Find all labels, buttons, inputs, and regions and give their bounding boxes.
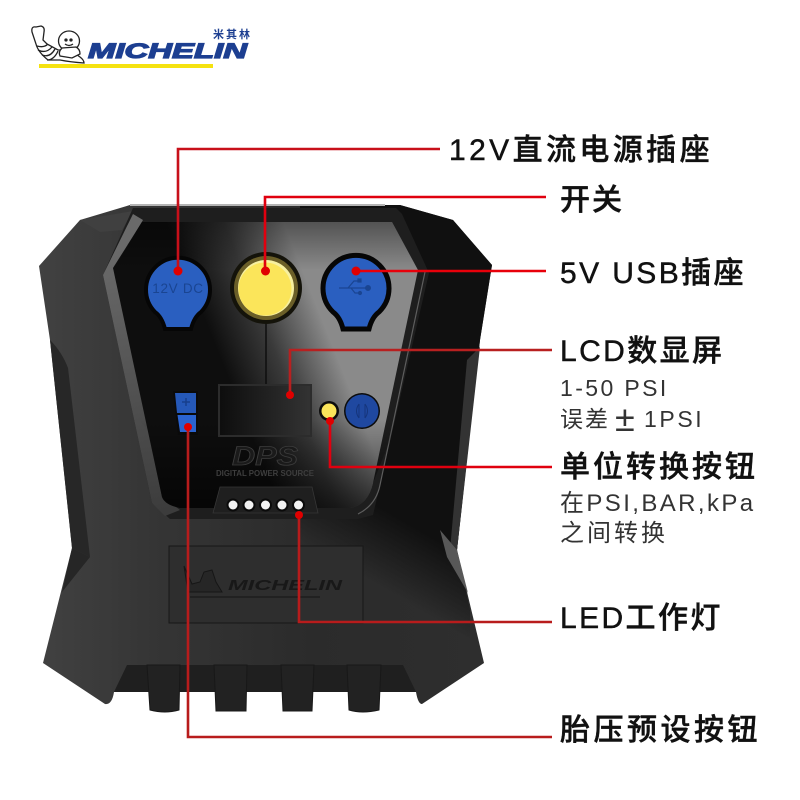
callout: 12V socket (174, 134, 713, 276)
callout: LCD display: LCD数显屏 (560, 335, 724, 368)
cap label: 12V DC (152, 281, 204, 296)
callout: unit button (326, 417, 758, 547)
callout: USB socket (352, 257, 746, 290)
callout: pressure preset: 胎压预设按钮 (560, 714, 761, 747)
LCD screen (219, 385, 311, 436)
panel bezel (103, 208, 429, 519)
callout: pressure preset (184, 423, 761, 747)
control panel (113, 222, 418, 508)
logo Chinese name: 米其林 (213, 27, 250, 41)
device tabs (147, 665, 381, 712)
LCD accuracy text: 误差 (560, 406, 610, 432)
power switch button (230, 252, 302, 324)
unit conversion text: 之间转换 (560, 520, 668, 547)
unit list text: 在PSI,BAR,kPa (560, 490, 756, 517)
DPS badge (216, 441, 315, 478)
callout: LED light: LED工作灯 (560, 602, 723, 635)
LCD accuracy text: ± (615, 398, 637, 439)
device: tyre inflator (39, 204, 492, 712)
device right side highlight (450, 347, 480, 550)
callout: unit button: 单位转换按钮 (560, 451, 758, 484)
device skirt recess (114, 665, 416, 692)
callout: switch (261, 184, 624, 276)
unit button (319, 401, 339, 421)
icon: USB symbol (339, 279, 370, 294)
DPS badge: DPS (232, 441, 298, 471)
device top highlight (130, 204, 385, 206)
LCD accuracy text: 1PSI (644, 406, 704, 432)
icon: Bibendum mascot (32, 26, 84, 63)
plate wordmark: MICHELIN (228, 577, 344, 594)
LCD range text: 1-50 PSI (560, 375, 669, 401)
panel center groove (265, 324, 267, 385)
bezel right highlight (358, 272, 425, 514)
callout: LCD display (286, 335, 724, 439)
embossed Michelin plate (169, 546, 363, 623)
bezel left highlight (103, 214, 180, 516)
device shell (39, 205, 492, 704)
callout: switch: 开关 (560, 184, 624, 217)
preset plus/minus button (173, 391, 198, 435)
logo: Michelin (32, 26, 250, 68)
LED indicator strip (213, 487, 318, 513)
logo wordmark: MICHELIN (88, 40, 248, 63)
DPS subtitle: DIGITAL POWER SOURCE (216, 469, 315, 478)
callout: 12V socket: 12V直流电源插座 (449, 134, 713, 167)
callout: USB socket: 5V USB插座 (560, 257, 746, 290)
callout: LED light (295, 511, 723, 635)
logo yellow underline (39, 64, 213, 68)
12V DC socket cap (146, 258, 210, 329)
device right dark side (300, 205, 492, 650)
plate mascot (184, 566, 222, 592)
USB socket cap (323, 255, 389, 329)
power button (344, 393, 380, 429)
device left side shade (50, 340, 90, 557)
